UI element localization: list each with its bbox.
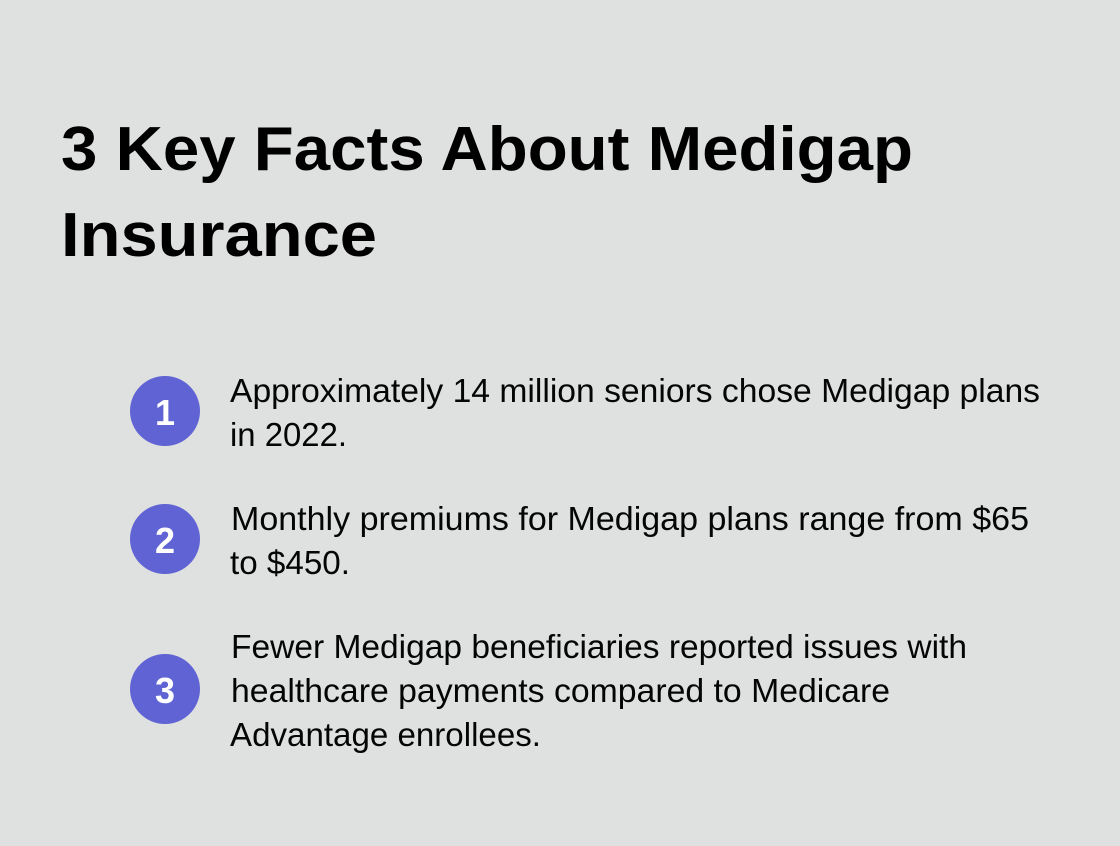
title: 3 Key Facts About Medigap bbox=[61, 115, 913, 184]
text: fact 3: Advantage enrollees. bbox=[230, 716, 541, 753]
fact 2 bbox=[130, 500, 1029, 581]
text: fact 3: Fewer Medigap beneficiaries reported issues with bbox=[231, 628, 967, 665]
text: fact 3: healthcare payments compared to Medicare bbox=[231, 672, 890, 709]
text: fact 2: Monthly premiums for Medigap plans range from $65 bbox=[231, 500, 1029, 537]
text: fact 2: to $450. bbox=[230, 544, 350, 581]
text: fact 1 bbox=[230, 372, 1040, 453]
fact 3 bbox=[130, 628, 967, 753]
text: fact 1: in 2022. bbox=[230, 416, 347, 453]
icon: number badge 3: 3 bbox=[155, 670, 175, 711]
icon: number badge 2: 2 bbox=[155, 520, 175, 561]
title: Insurance bbox=[61, 201, 377, 270]
text: fact 2 bbox=[230, 500, 1029, 581]
icon: number badge 1 bbox=[130, 376, 200, 446]
title bbox=[61, 115, 913, 270]
icon: number badge 1: 1 bbox=[155, 392, 175, 433]
icon: number badge 2 bbox=[130, 504, 200, 574]
text: fact 1: Approximately 14 million seniors chose Medigap plans bbox=[230, 372, 1040, 409]
icon: number badge 3 bbox=[130, 654, 200, 724]
text: fact 3 bbox=[230, 628, 967, 753]
fact 1 bbox=[130, 372, 1040, 453]
